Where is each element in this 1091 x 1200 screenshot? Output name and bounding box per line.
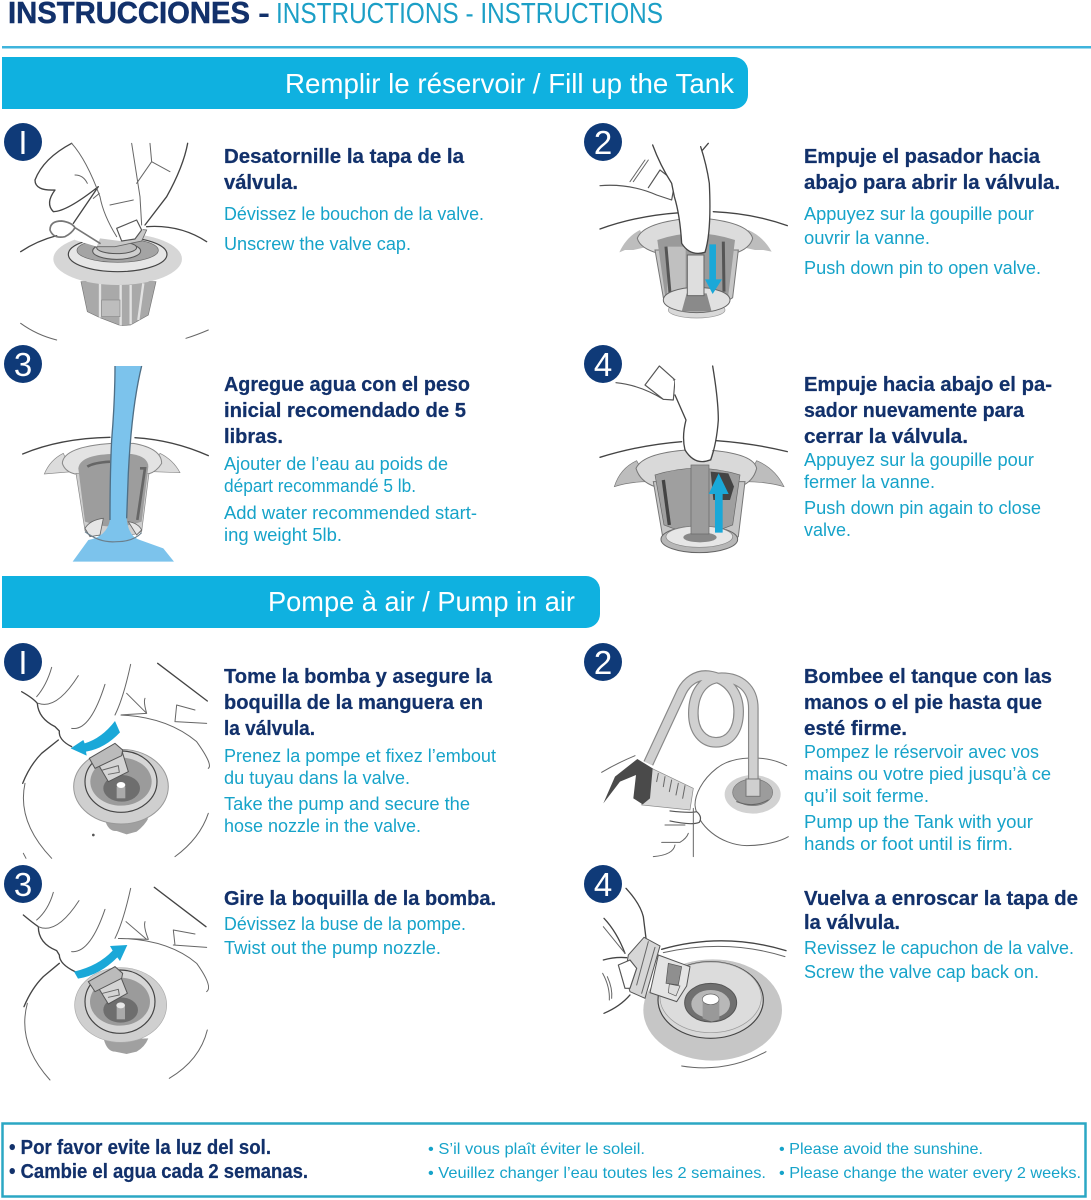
callout: care notes: • Veuillez changer l’eau toutes les 2 semaines. [428, 1165, 766, 1182]
text block: Twist out the pump nozzle. [224, 938, 441, 958]
text block: Prenez la pompe et fixez l’embout [224, 746, 496, 766]
text block [224, 145, 484, 254]
text block: Push down pin to open valve. [804, 258, 1041, 278]
text block [804, 373, 1052, 540]
icon: step badge 3: 3 [14, 346, 32, 383]
illustration: securing the hose nozzle [22, 663, 209, 858]
text block: Pump up the Tank with your [804, 812, 1033, 832]
text block [224, 665, 496, 836]
banner: fill up the tank: Remplir le réservoir / Fill up the Tank [285, 68, 735, 99]
text block: du tuyau dans la valve. [224, 768, 410, 788]
icon: step badge 4: 4 [594, 346, 612, 383]
callout: care notes: • Please avoid the sunshine. [779, 1141, 983, 1158]
panel: pump step 3 [4, 865, 496, 1080]
text block: Agregue agua con el peso [224, 373, 470, 396]
text block: esté firme. [804, 717, 907, 740]
callout: care notes: • Por favor evite la luz del sol. [9, 1136, 271, 1159]
text block: Bombee el tanque con las [804, 665, 1052, 688]
callout: care notes: • Please change the water every 2 weeks. [779, 1165, 1081, 1182]
panel: fill step 3 [4, 345, 477, 562]
text block: Desatornille la tapa de la [224, 145, 465, 168]
icon: step badge 1 [4, 643, 42, 681]
text block: Take the pump and secure the [224, 794, 470, 814]
text block: Empuje hacia abajo el pa- [804, 373, 1052, 396]
text block: Appuyez sur la goupille pour [804, 450, 1034, 470]
illustration: pushing the pin again [600, 366, 787, 553]
text block: Appuyez sur la goupille pour [804, 204, 1034, 224]
callout: care notes: • S’il vous plaît éviter le soleil. [428, 1141, 645, 1158]
icon: step badge 2 [584, 123, 622, 161]
text block: Vuelva a enroscar la tapa de [804, 887, 1078, 910]
text block: Dévissez la buse de la pompe. [224, 914, 466, 934]
text block [804, 145, 1060, 278]
text block: Screw the valve cap back on. [804, 962, 1039, 982]
text block [804, 887, 1078, 982]
banner: pump in air: Pompe à air / Pump in air [268, 586, 575, 617]
illustration: pushing down the pin [600, 143, 787, 318]
icon: step badge 2: 2 [594, 124, 612, 161]
text block: Unscrew the valve cap. [224, 234, 411, 254]
banner: pump in air [2, 576, 600, 628]
icon: step badge 1 [4, 123, 42, 161]
text block [224, 887, 496, 958]
illustration: pouring water [23, 366, 208, 562]
text block: Empuje el pasador hacia [804, 145, 1041, 168]
text block: Ajouter de l’eau au poids de [224, 454, 448, 474]
text block: abajo para abrir la válvula. [804, 171, 1060, 194]
illustration: unscrewing the valve cap [21, 143, 208, 340]
text block: Add water recommended start- [224, 503, 477, 523]
panel: pump step 4 [584, 865, 1078, 1068]
banner: fill up the tank [2, 57, 748, 109]
text block: Dévissez le bouchon de la valve. [224, 204, 484, 224]
icon: step badge 2: 2 [594, 644, 612, 681]
text block: válvula. [224, 171, 298, 194]
illustration: pumping up the tank [602, 676, 788, 857]
text block: cerrar la válvula. [804, 425, 968, 448]
panel: pump step 1 [4, 643, 496, 858]
text block: hands or foot until is firm. [804, 834, 1013, 854]
text block: inicial recomendado de 5 [224, 399, 466, 422]
text block [804, 665, 1052, 854]
icon: step badge 4 [584, 345, 622, 383]
title [8, 0, 663, 30]
text block: ing weight 5lb. [224, 525, 342, 545]
panel: fill step 4 [584, 345, 1052, 553]
panel: fill step 2 [584, 123, 1060, 318]
icon: step badge 1: I [18, 644, 28, 681]
text block: mains ou votre pied jusqu’à ce [804, 764, 1051, 784]
icon: step badge 3: 3 [14, 866, 32, 903]
text block: départ recommandé 5 lb. [224, 476, 416, 496]
icon: step badge 3 [4, 345, 42, 383]
callout: care notes: • Cambie el agua cada 2 semanas. [9, 1160, 308, 1183]
text block: la válvula. [224, 717, 315, 740]
text block: manos o el pie hasta que [804, 691, 1042, 714]
illustration: screwing the cap back on [603, 888, 786, 1068]
text block: sador nuevamente para [804, 399, 1025, 422]
illustration: twisting out the nozzle [23, 887, 209, 1080]
text block: Pompez le réservoir avec vos [804, 742, 1039, 762]
text block [224, 373, 477, 545]
text block: boquilla de la manguera en [224, 691, 483, 714]
icon: step badge 2 [584, 643, 622, 681]
text block: ouvrir la vanne. [804, 228, 930, 248]
callout: care notes [2, 1124, 1086, 1196]
text block: Push down pin again to close [804, 498, 1041, 518]
text block: la válvula. [804, 911, 900, 934]
text block: hose nozzle in the valve. [224, 816, 421, 836]
icon: step badge 4: 4 [594, 866, 612, 903]
icon: step badge 1: I [18, 124, 28, 161]
panel: pump step 2 [584, 643, 1052, 857]
icon: step badge 3 [4, 865, 42, 903]
text block: Gire la boquilla de la bomba. [224, 887, 496, 910]
text block: libras. [224, 425, 283, 448]
text block: fermer la vanne. [804, 472, 935, 492]
text block: Revissez le capuchon de la valve. [804, 938, 1074, 958]
panel: fill step 1 [4, 123, 484, 340]
text block: valve. [804, 520, 851, 540]
icon: step badge 4 [584, 865, 622, 903]
text block: qu’il soit ferme. [804, 786, 929, 806]
text block: Tome la bomba y asegure la [224, 665, 493, 688]
